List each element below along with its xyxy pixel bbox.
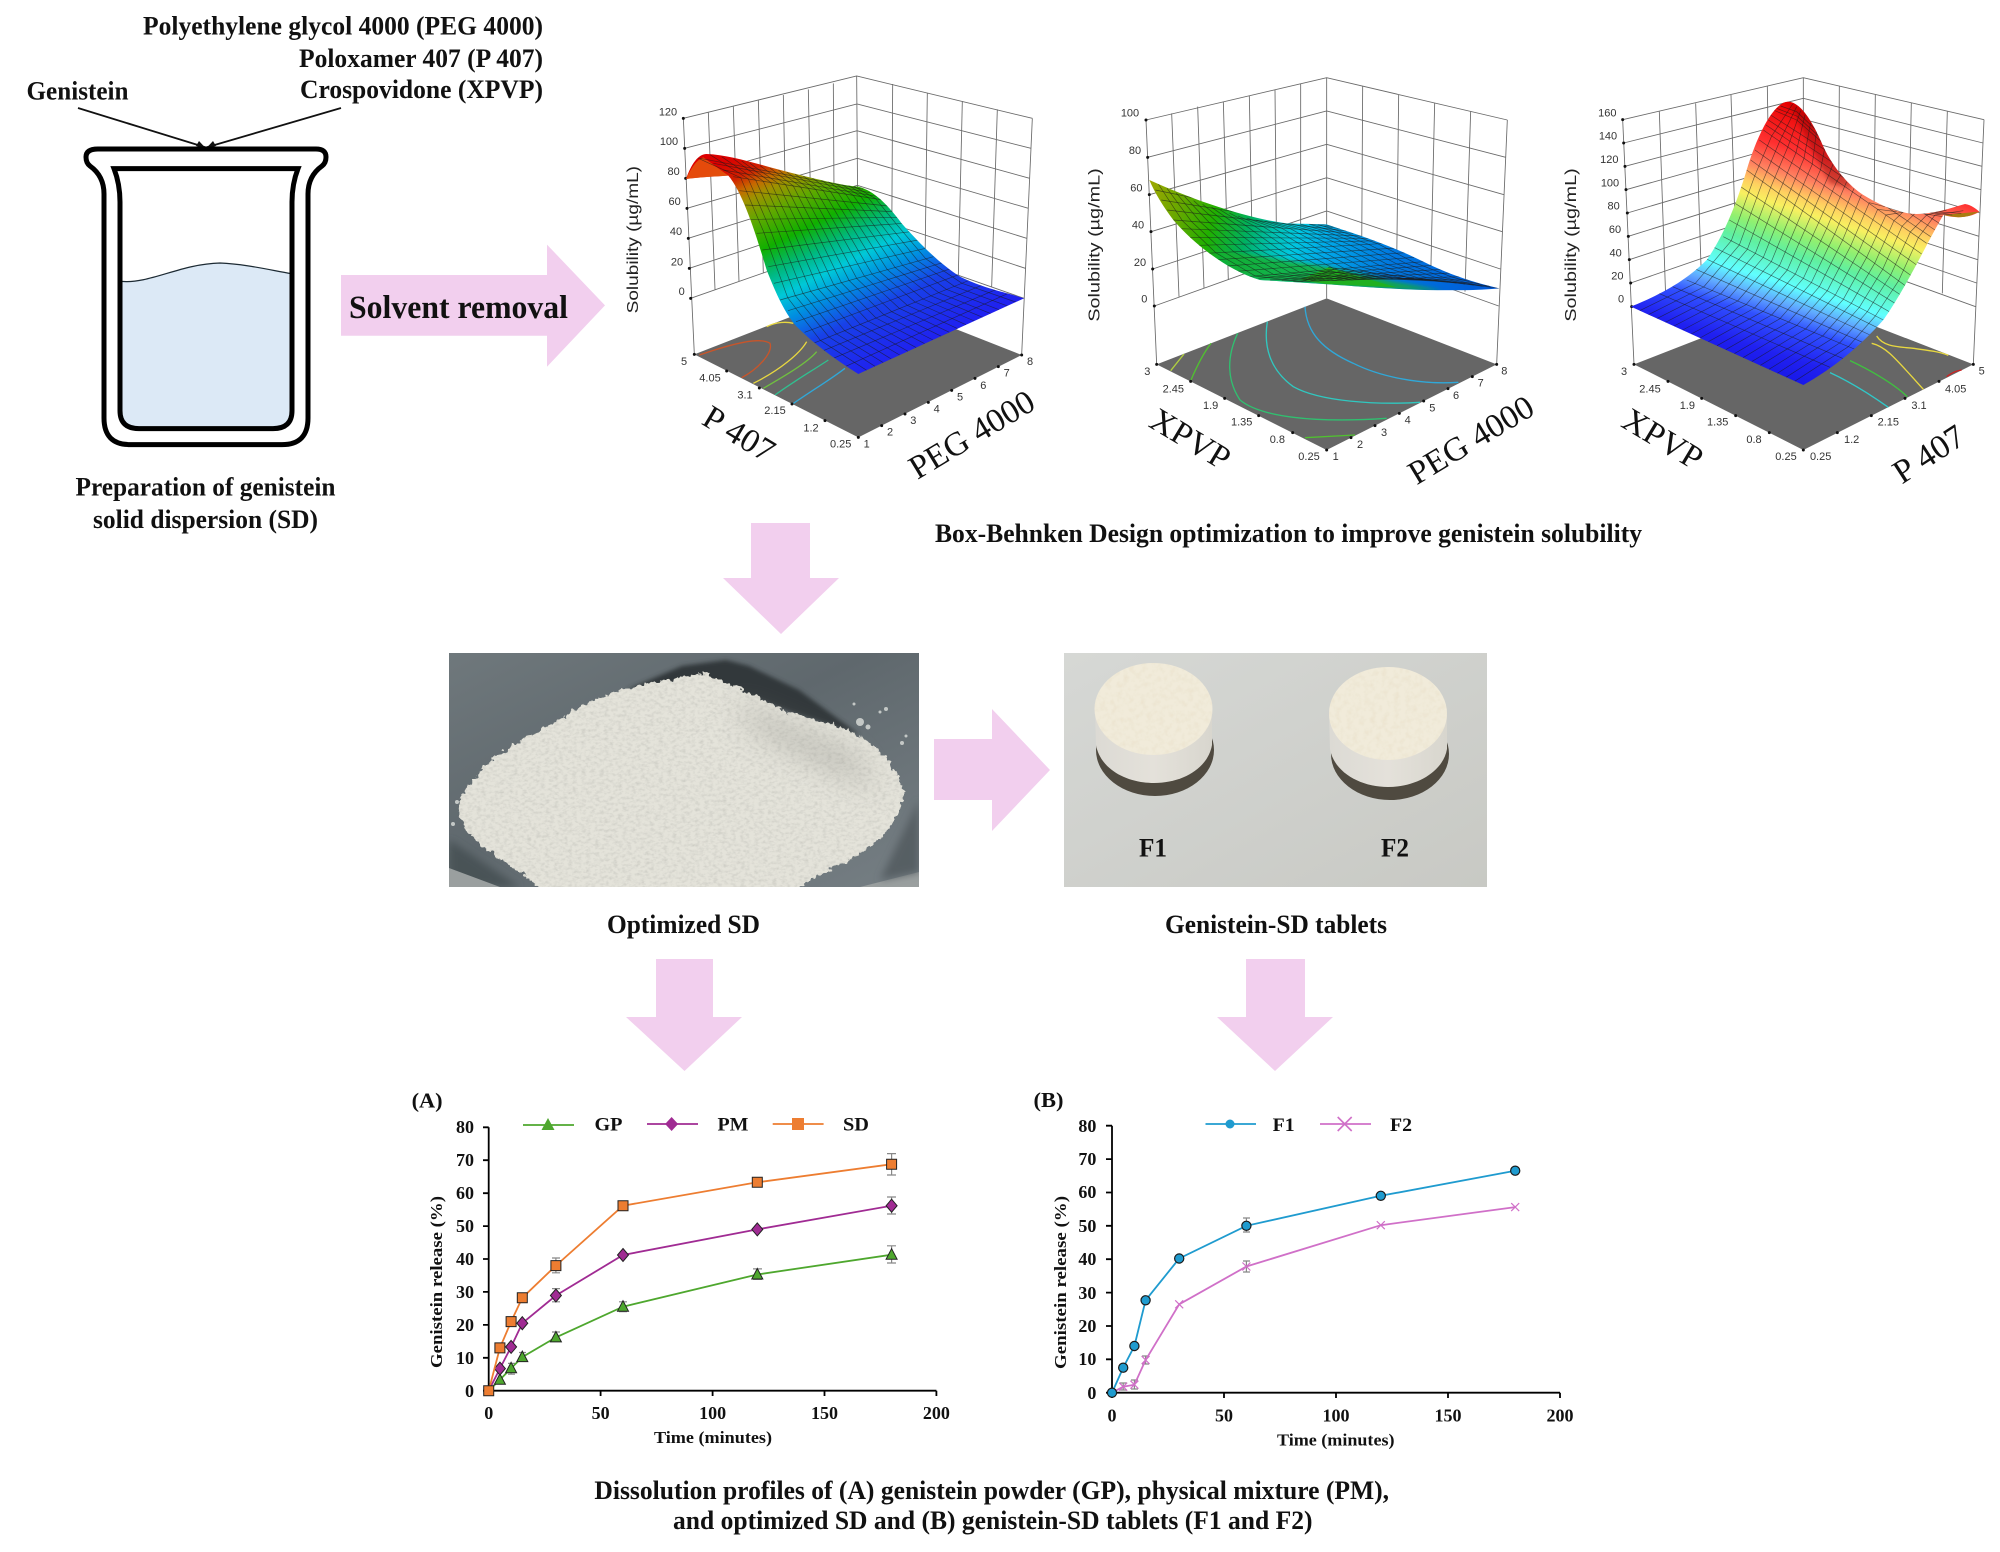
legend [523,1115,869,1136]
floor tick labels: 1.2 [1844,434,1859,446]
z-axis ticks: 0 [1141,294,1147,306]
floor tick labels: 7 [1004,368,1010,380]
chart: response surface P 407 vs PEG 4000 [625,76,1041,487]
input materials label: Crospovidone (XPVP) [300,75,543,104]
x tick labels: 100 [1322,1406,1350,1426]
floor tick labels: 1.9 [1203,400,1218,412]
y tick labels: 10 [456,1348,474,1368]
bottom caption: and optimized SD and (B) genistein-SD tablets (F1 and F2) [673,1506,1312,1535]
x tick labels: 150 [811,1403,838,1423]
floor tick labels: 5 [957,392,963,404]
axes [1106,1126,1560,1398]
y tick labels: 80 [1078,1116,1096,1136]
axis label XPVP: XPVP [1615,401,1709,478]
x tick labels: 100 [699,1403,726,1423]
z-axis title: Solubility (µg/mL) [1087,168,1104,322]
y tick labels: 0 [1087,1383,1096,1403]
z-axis ticks: 40 [670,226,682,238]
powder shading [742,704,872,787]
z-axis ticks: 0 [679,286,685,298]
floor tick labels: 7 [1478,378,1484,390]
floor tick labels: 3 [910,415,916,427]
z-axis ticks: 140 [1599,131,1617,143]
y tick labels [456,1117,474,1401]
floor tick labels: 0.8 [1270,434,1285,446]
z-axis title: Solubility (µg/mL) [1563,168,1580,322]
floor tick labels: 4.05 [1945,383,1966,395]
arrow: optimized SD to tablets [934,709,1050,831]
tablet labels: F1 [1139,834,1167,863]
arrow: down to chart A [626,959,742,1071]
surface [1623,93,1987,393]
z-axis ticks: 100 [1121,108,1139,120]
floor tick labels: 5 [681,356,687,368]
floor with contours [1634,298,1973,450]
powder pile [459,674,903,896]
floor with contours [1157,298,1497,450]
axis label XPVP: XPVP [1143,401,1237,478]
y tick labels: 20 [1078,1316,1096,1336]
chart: response surface XPVP vs PEG 4000 [1087,78,1541,492]
x tick labels: 200 [1546,1406,1574,1426]
z-axis ticks [659,106,685,298]
z-axis ticks [1598,108,1624,306]
floor tick labels: 3.1 [737,389,753,401]
legend: F2 [1390,1115,1412,1136]
surface [1150,180,1500,290]
y tick labels: 70 [1078,1149,1096,1169]
floor tick labels: 2.15 [764,405,786,417]
z-axis ticks: 40 [1132,220,1144,232]
icon: beaker with solution [86,149,326,445]
floor tick labels: 6 [1453,390,1459,402]
bottom caption: Dissolution profiles of (A) genistein powder (GP), physical mixture (PM), [594,1476,1389,1505]
series PM [489,1199,897,1391]
bottom caption [594,1476,1389,1535]
x axis title: Time (minutes) [1277,1431,1394,1450]
floor tick labels: 1.9 [1680,400,1695,412]
floor tick labels: 5 [1429,402,1435,414]
z-axis ticks: 0 [1618,294,1624,306]
floor tick labels: 3 [1381,427,1387,439]
z-axis ticks: 120 [1600,154,1618,166]
y tick labels: 70 [456,1150,474,1170]
floor tick labels: 4 [1405,414,1411,426]
Box-Behnken caption: Box-Behnken Design optimization to improve genistein solubility [935,519,1642,548]
floor tick labels [1144,366,1507,463]
x tick labels: 50 [1215,1406,1233,1426]
z-axis ticks: 60 [669,196,681,208]
y tick labels: 0 [465,1381,474,1401]
floor tick labels: 2 [887,427,893,439]
error bars [1120,1218,1250,1390]
arrow: solvent removal [341,245,605,367]
powder shadow [626,660,860,735]
z-axis ticks: 20 [1611,271,1623,283]
floor tick labels: 2.45 [1163,383,1184,395]
chart: response surface XPVP vs P 407 [1563,78,1987,491]
solution liquid [121,263,291,428]
z-axis ticks: 20 [671,256,683,268]
legend: PM [718,1115,749,1136]
input materials label: Poloxamer 407 (P 407) [299,44,543,73]
genistein label: Genistein [26,76,129,105]
z-axis title: Solubility (µg/mL) [625,166,642,313]
series F2 [1112,1203,1519,1393]
beaker inner wall [114,169,298,429]
z-axis ticks: 80 [1608,201,1620,213]
floor tick labels: 8 [1027,356,1033,368]
x tick labels [484,1403,950,1423]
photo: genistein-SD tablets [1064,653,1487,887]
z-axis ticks [1121,108,1147,306]
arrow: down to chart B [1217,959,1333,1071]
arrows into beaker [78,108,341,148]
floor tick labels: 1 [1333,451,1339,463]
series F1 [1107,1166,1520,1397]
x tick labels: 50 [592,1403,610,1423]
floor tick labels: 6 [980,380,986,392]
floor tick labels: 5 [1979,366,1985,378]
panel letter B: (B) [1034,1088,1064,1112]
x tick labels: 0 [484,1403,493,1423]
loose powder specks [451,702,908,826]
series SD [484,1159,897,1396]
floor tick labels: 0.25 [1298,451,1320,463]
arrow: down to optimized SD [723,523,839,634]
axis label P 407: P 407 [696,399,781,470]
z-axis ticks: 40 [1610,247,1622,259]
tablet F2 [1329,667,1449,800]
floor tick labels: 1.35 [1707,417,1728,429]
y tick labels: 60 [456,1183,474,1203]
y axis title: Genistein release (%) [1051,1196,1070,1369]
y tick labels: 40 [1078,1249,1096,1269]
y tick labels [1078,1116,1096,1403]
y tick labels: 80 [456,1117,474,1137]
legend: GP [594,1115,623,1136]
caption: tablets: Genistein-SD tablets [1165,910,1387,939]
caption: optimized SD: Optimized SD [607,910,760,939]
z-axis ticks: 80 [668,166,680,178]
floor tick labels: 2.45 [1639,383,1661,395]
chart A: dissolution profiles [412,1089,950,1447]
floor tick labels: 3 [1621,366,1627,378]
floor tick labels: 8 [1501,366,1507,378]
z-axis ticks: 60 [1130,182,1142,194]
beaker outer wall [86,149,326,445]
y tick labels: 30 [1078,1283,1096,1303]
floor tick labels: 0.25 [1810,451,1831,463]
axes [483,1127,936,1396]
axis label PEG 4000: PEG 4000 [902,383,1041,487]
photo: optimized SD powder [449,653,919,896]
x tick labels: 0 [1108,1406,1116,1426]
surface [686,154,1024,374]
input materials label: Polyethylene glycol 4000 (PEG 4000) [143,12,543,41]
y axis title: Genistein release (%) [427,1196,446,1368]
surface edge tones [449,842,516,887]
input materials label [143,12,543,104]
chart B: tablet dissolution profiles [1034,1088,1574,1450]
floor tick labels: 0.8 [1746,434,1762,446]
floor tick labels [681,356,1033,450]
series GP [489,1249,897,1391]
panel letter A: (A) [412,1089,443,1113]
floor tick labels: 1.2 [803,422,819,434]
x tick labels: 200 [923,1403,950,1423]
x axis title: Time (minutes) [654,1428,772,1447]
y tick labels: 60 [1078,1182,1096,1202]
floor tick labels: 2 [1357,439,1363,451]
floor with contours [694,291,1022,437]
floor tick labels: 0.25 [1775,451,1797,463]
floor tick labels [1621,366,1985,463]
legend [1206,1115,1412,1136]
x tick labels: 150 [1434,1406,1462,1426]
floor tick labels: 1 [864,438,870,450]
z-axis ticks: 120 [659,106,677,118]
floor tick labels: 0.25 [830,438,851,450]
y tick labels: 50 [456,1216,474,1236]
floor tick labels: 4 [934,403,940,415]
y tick labels: 20 [456,1315,474,1335]
axis label P 407: P 407 [1886,418,1972,491]
y tick labels: 40 [456,1249,474,1269]
x tick labels [1108,1406,1574,1426]
z-axis ticks: 80 [1129,145,1141,157]
legend: F1 [1273,1115,1295,1136]
legend: SD [843,1115,869,1136]
z-axis ticks: 100 [660,136,678,148]
tablet F1 [1094,663,1214,796]
arrow: solvent removal: Solvent removal [349,290,568,326]
error bars [508,1154,896,1374]
floor tick labels: 3.1 [1911,400,1927,412]
y tick labels: 10 [1078,1349,1096,1369]
photo: genistein-SD tablets: F2 [1381,834,1409,863]
z-axis ticks: 60 [1609,224,1621,236]
y tick labels: 50 [1078,1216,1096,1236]
floor tick labels: 1.35 [1231,417,1252,429]
floor tick labels: 2.15 [1878,417,1899,429]
z-axis ticks: 100 [1601,177,1619,189]
z-axis ticks: 20 [1134,257,1146,269]
z-axis ticks: 160 [1598,108,1616,120]
y tick labels: 30 [456,1282,474,1302]
beaker caption [76,473,336,534]
axis label PEG 4000: PEG 4000 [1402,388,1541,492]
floor tick labels: 3 [1144,366,1150,378]
floor tick labels: 4.05 [699,373,721,385]
beaker caption: Preparation of genistein [76,473,336,502]
beaker caption: solid dispersion (SD) [93,505,318,534]
